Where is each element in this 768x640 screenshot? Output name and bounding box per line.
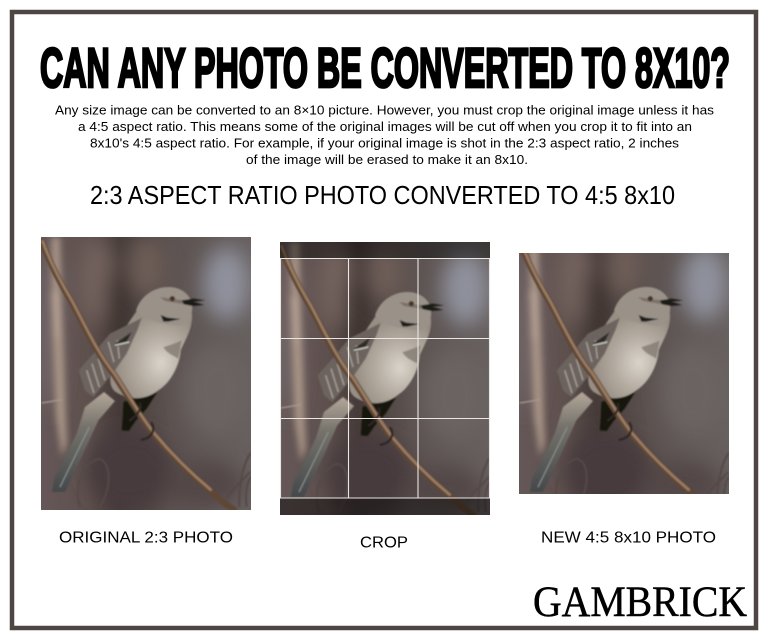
intro text block: Any size image can be converted to an 8×10 picture. However, you must crop the original image unless it has: [55, 102, 715, 118]
intro text block: [55, 102, 715, 167]
intro text block: of the image will be erased to make it an 8x10.: [246, 152, 528, 167]
photo: new 4:5 8x10: [519, 253, 729, 494]
caption: original: ORIGINAL 2:3 PHOTO: [59, 530, 233, 546]
intro text block: a 4:5 aspect ratio. This means some of the original images will be cut off when you crop it to fit into an: [78, 119, 692, 134]
crop darkened bands: [280, 242, 490, 515]
photo: original 2:3: [41, 237, 251, 510]
caption: new: NEW 4:5 8x10 PHOTO: [541, 530, 716, 546]
subheading: 2:3 ASPECT RATIO PHOTO CONVERTED TO 4:5 8x10: [90, 180, 675, 210]
photo: crop overlay panel: [269, 235, 502, 522]
intro text block: 8x10's 4:5 aspect ratio. For example, if your original image is shot in the 2:3 aspect ratio, 2 inches: [90, 136, 680, 150]
crop grid: [280, 258, 490, 498]
caption: crop: CROP: [360, 534, 408, 552]
logo: Gambrick: GAMBRICK: [533, 579, 747, 626]
